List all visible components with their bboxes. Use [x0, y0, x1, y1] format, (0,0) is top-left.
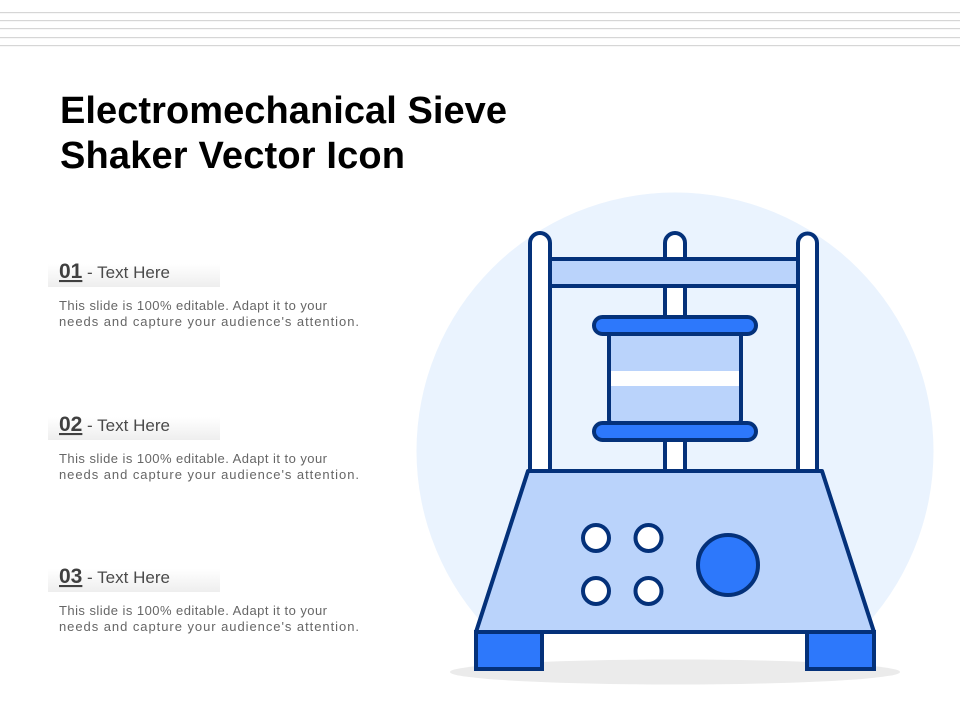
heading bar 02	[48, 417, 220, 440]
sieve stack	[594, 317, 756, 440]
machine base	[476, 471, 874, 632]
crossbar	[550, 259, 798, 286]
left foot	[476, 632, 542, 669]
heading 03	[59, 565, 170, 588]
body text 01: needs and capture your audience's attention.	[59, 314, 359, 329]
title: Shaker Vector Icon	[60, 135, 405, 177]
body text 02: needs and capture your audience's attention.	[59, 467, 359, 482]
heading 01	[59, 260, 170, 283]
right foot	[807, 632, 874, 669]
body text 02	[59, 451, 359, 482]
heading 01: - Text Here	[87, 263, 170, 282]
heading 02: - Text Here	[87, 416, 170, 435]
body text 01: This slide is 100% editable. Adapt it to your	[59, 298, 328, 313]
heading bar 01	[48, 264, 220, 287]
heading 03: - Text Here	[87, 568, 170, 587]
heading 02: 02	[59, 413, 82, 436]
body text 03: needs and capture your audience's attention.	[59, 619, 359, 634]
body text 01	[59, 298, 359, 329]
heading 03: 03	[59, 565, 82, 588]
panel: item 01	[48, 260, 359, 329]
heading bar 03	[48, 569, 220, 592]
title: Electromechanical Sieve	[60, 90, 507, 132]
panel: item 02	[48, 413, 359, 482]
background circle	[416, 192, 934, 618]
heading 01: 01	[59, 260, 83, 283]
body text 03: This slide is 100% editable. Adapt it to your	[59, 603, 328, 618]
title	[60, 90, 507, 177]
heading 02	[59, 413, 170, 436]
support posts	[530, 233, 817, 472]
icon: electromechanical sieve shaker	[416, 192, 934, 710]
panel: item 03	[48, 565, 359, 634]
large dial	[698, 535, 758, 595]
body text 02: This slide is 100% editable. Adapt it to your	[59, 451, 328, 466]
small buttons	[583, 525, 662, 604]
ground shadow	[450, 660, 900, 684]
body text 03	[59, 603, 359, 634]
